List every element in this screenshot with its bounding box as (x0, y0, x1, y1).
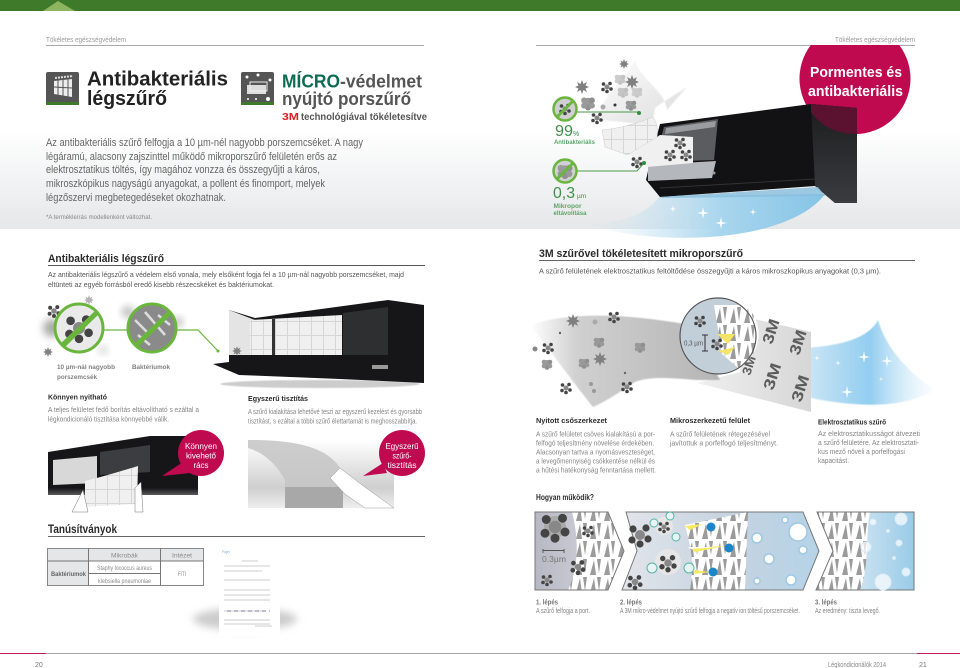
step 2 caption (620, 598, 800, 615)
certificates table: Baktériumok (51, 571, 86, 578)
title: antibacterial filter: légszűrő (87, 88, 167, 110)
intro paragraph: Az antibakteriális szűrő felfogja a 10 µm-nél nagyobb porszemcséket. A nagy (46, 137, 363, 149)
blue airflow under unit (590, 194, 825, 238)
step 1 diagram: 0.3µm (542, 555, 566, 564)
title: antibacterial filter (87, 68, 228, 110)
easy cleaning description: tisztítást, s ezáltal a többi szűrő élettartamát is meghosszabbítja. (248, 418, 417, 426)
step 1 caption: A szűrő felfogja a port. (536, 608, 590, 615)
title: antibacterial filter: Antibakteriális (87, 68, 228, 90)
feature: electrostatic filter: kapacitást. (818, 458, 849, 465)
airborne particles (575, 59, 642, 124)
icon: micro filter (241, 72, 274, 105)
step 3 caption (815, 598, 880, 615)
antibacterial filter description (48, 270, 404, 289)
feature: open tube structure (536, 416, 656, 474)
antibacterial filter description: Az antibakteriális légszűrő a védelem első vonala, mely elsőként fogja fel a 10 µm-nál nagyobb porszemcséket, majd (48, 270, 404, 279)
easy opening description: légkondicionáló tisztítása könnyebbé válik. (48, 416, 169, 424)
easy opening description (48, 407, 199, 424)
header: left page: Tökéletes egészségvédelem (46, 35, 126, 44)
certificates table: Intézet (172, 552, 192, 560)
subheading: easy cleaning: Egyszerű tisztítás (248, 394, 308, 403)
title: micro protection filter: 3M (282, 111, 299, 123)
step 3 caption: 3. lépés (815, 598, 837, 606)
footnote: *A termékleírás modellenként változhat. (46, 214, 152, 221)
blue clean air flow (805, 320, 935, 405)
heading: how it works: Hogyan működik? (536, 493, 594, 502)
step 3 caption: Az eredmény: tiszta levegő. (815, 608, 880, 615)
feature: electrostatic filter: Az elektrosztatikusságot átvezeti (818, 431, 920, 438)
3M filter texture (697, 317, 813, 412)
3M filter description: A szűrő felületének elektrosztatikus feltöltődése összegyűjti a káros mikroszkopikus anyagokat (0,3 µm). (539, 266, 881, 276)
feature: electrostatic filter: Elektrosztatikus szűrő (818, 420, 886, 426)
dust stream (530, 312, 720, 407)
stat: 0.3 micrometre dust removal: Mikropor (554, 203, 582, 210)
certificates table: klebsiella pneumoniae (98, 578, 151, 585)
filter wisp behind the dust (600, 60, 687, 125)
certificates table: Staphy lococcus aureus (97, 565, 153, 572)
step 2 diagram (622, 512, 819, 590)
intro paragraph: elektrosztatikus töltés, így magához vonzza és összegyűjti a káros, (46, 164, 320, 176)
antibacterial filter description: eltünteti az egyéb forrásból eredő kisebb részecskéket és baktériumokat. (48, 280, 274, 289)
feature: open tube structure: A szűrő felületet csöves kialakítású a por- (536, 432, 656, 438)
top green bar (0, 0, 960, 11)
labels: particles and bacteria: Baktériumok (132, 364, 170, 371)
callout: easily removable grille: kivehető (186, 450, 216, 460)
feature: electrostatic filter: a szűrő felületére. Az elektrosztati- (818, 440, 920, 447)
stat: 0.3 micrometre dust removal (553, 160, 646, 217)
callout: easily removable grille: rács (194, 460, 208, 470)
icon: antibacterial filter (46, 72, 79, 105)
heading: 3M filter: 3M szűrővel tökéletesített mikroporszűrő (539, 248, 743, 260)
stat: 99% antibacterial: Antibakteriális (554, 139, 595, 146)
feature: microstructured surface: A szűrő felületének rétegezésével (670, 432, 770, 438)
3M filter texture: 3M (760, 361, 785, 392)
easy opening description: A teljes felületet fedő borítás eltávolítható s ezáltal a (48, 407, 199, 414)
stat: 99% antibacterial: 99 (555, 123, 573, 140)
feature: open tube structure: Nyitott csőszerkezet (536, 416, 607, 425)
title: micro protection filter: -védelmet (340, 72, 422, 92)
magnified filter lens (680, 298, 759, 374)
pink badge: dust free and antibacterial: Pormentes és (810, 65, 902, 81)
feature: microstructured surface: Mikroszerkezetű felület (670, 416, 750, 425)
footer (0, 653, 960, 668)
callout: easy filter cleaning (363, 430, 425, 476)
3M filter texture: 3M (786, 328, 810, 357)
step 1 diagram (535, 512, 624, 590)
certificates table: Mikrobák (111, 552, 139, 560)
callout: easily removable grille: Könnyen (185, 441, 217, 451)
stat: 0.3 micrometre dust removal: µm (577, 193, 586, 200)
title: micro protection filter: MÍCRO (282, 70, 340, 92)
title: micro protection filter (282, 70, 427, 123)
stat: 99% antibacterial (554, 98, 641, 146)
labels: particles and bacteria: 10 µm-nál nagyobb (57, 364, 115, 371)
intro paragraph: légzőszervi megbetegedéseket okozhatnak. (46, 192, 226, 204)
3M filter texture: 3M (759, 317, 783, 346)
certificates table: FITI (178, 571, 186, 578)
step 1 caption: 1. lépés (536, 598, 558, 606)
top panel background (0, 130, 960, 229)
header: right page: Tökéletes egészségvédelem (835, 35, 915, 44)
heading: antibacterial filter: Antibakteriális légszűrő (48, 253, 164, 265)
feature: electrostatic filter (818, 420, 920, 465)
removed filter sheets (602, 117, 693, 168)
certificate document: Fujin (222, 550, 230, 554)
feature: microstructured surface (669, 416, 778, 448)
labels: particles and bacteria (57, 364, 170, 381)
pink badge: dust free and antibacterial: antibakteriális (808, 84, 903, 100)
photo: cleaning the filter (248, 440, 394, 508)
prohibited icons: dust and bacteria (43, 295, 220, 357)
feature: open tube structure: Alacsonyan tartva a nyomásveszteséget, (536, 450, 655, 456)
pink badge: dust free and antibacterial (800, 45, 910, 134)
step 1 caption (536, 598, 590, 615)
certificates table (48, 548, 204, 586)
certificate document (193, 547, 297, 636)
easy cleaning description (248, 409, 422, 426)
feature: open tube structure: a hűtési hatékonyság fenntartása mellett. (536, 468, 656, 474)
magnified filter lens: 0,3 µm (684, 338, 703, 348)
step 2 caption: A 3M mikro-védelmet nyújtó szűrő felfogja a negatív ion töltésű porszemcséket. (620, 608, 800, 615)
sparkles (669, 205, 893, 398)
photo: removing the grille (48, 436, 198, 512)
title: micro protection filter: technológiával tökéletesítve (301, 111, 427, 123)
stat: 0.3 micrometre dust removal: 0,3 (553, 185, 575, 202)
callout: easy filter cleaning: Egyszerű (386, 441, 419, 451)
stat: 99% antibacterial: % (573, 131, 579, 138)
easy cleaning description: A szűrő kialakítása lehetővé teszi az egyszerű kezelést és gyorsabb (248, 409, 422, 416)
feature: open tube structure: a levegőmennyiség csökkentése nélkül és (536, 458, 655, 466)
open air conditioner photo (213, 300, 424, 388)
intro paragraph (46, 137, 363, 204)
labels: particles and bacteria: porszemcsék (57, 374, 97, 381)
feature: open tube structure: felfogó teljesítmény növelése érdekében. (536, 440, 654, 448)
3M filter texture: 3M (788, 373, 813, 404)
stat: 0.3 micrometre dust removal: eltávolítása (554, 210, 587, 217)
callout: easily removable grille (162, 430, 224, 476)
feature: electrostatic filter: kus mező növeli a porfelfogási (818, 449, 905, 456)
subheading: easy opening: Könnyen nyitható (48, 392, 107, 402)
step 3 diagram (816, 512, 914, 590)
step 2 caption: 2. lépés (620, 598, 642, 606)
intro paragraph: légáramú, alacsony zajszinttel működő mikroporszűrő felületén erős az (46, 151, 337, 163)
3M filter texture: 3M (739, 354, 759, 377)
feature: microstructured surface: javítottuk a porfelfogó teljesítményt. (669, 440, 778, 448)
heading: certificates: Tanúsítványok (48, 522, 117, 536)
air conditioner unit (646, 104, 857, 203)
callout: easy filter cleaning: tisztítás (388, 460, 416, 470)
title: micro protection filter: nyújtó porszűrő (282, 89, 411, 109)
intro paragraph: mikroszkópikus nagyságú anyagokat, a pollent és finomport, melyek (46, 178, 325, 190)
callout: easy filter cleaning: szűrő- (392, 450, 412, 460)
